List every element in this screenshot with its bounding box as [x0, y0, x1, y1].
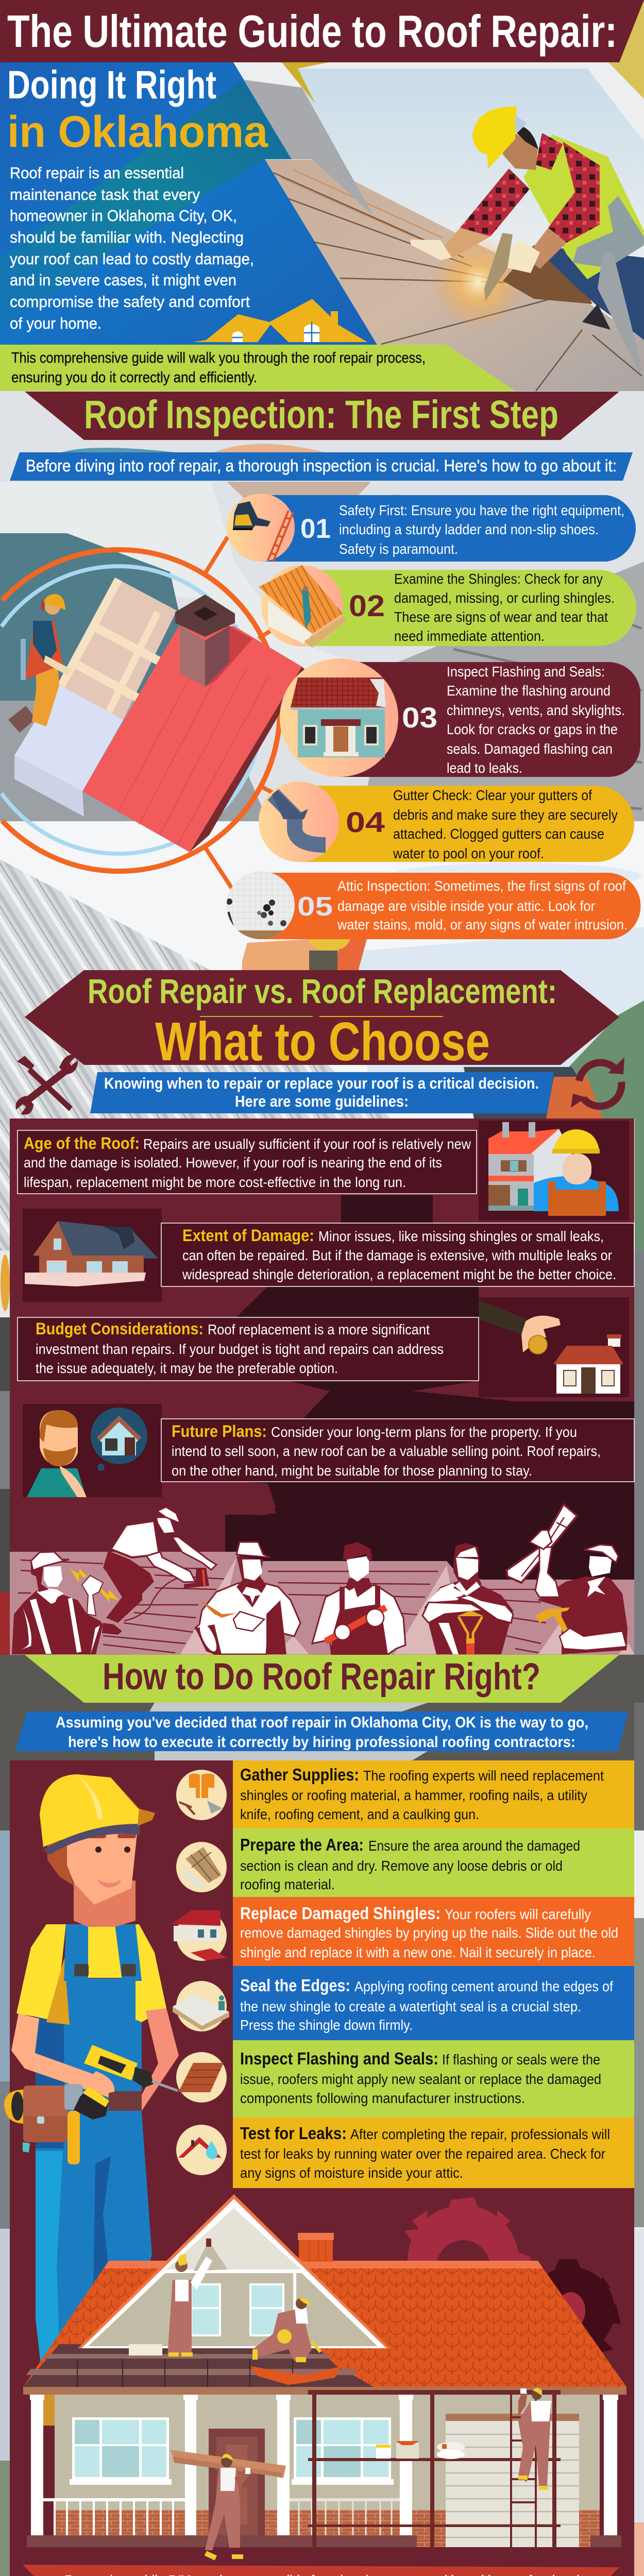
text box: budget considerations: the issue adequately, it may be the preferable option.: [36, 1360, 338, 1376]
text box: future plans: Future Plans:: [172, 1422, 267, 1440]
intro strip text: This comprehensive guide will walk you through the roof repair process,: [11, 350, 426, 366]
background: salmon roof tiles behind footer: [0, 2522, 644, 2576]
text: gutter check: debris and make sure they are securely: [393, 807, 618, 823]
text: gutter check: Gutter Check: Clear your gutters of: [393, 787, 592, 803]
lime intro strip: [0, 345, 515, 391]
subtitle: doing it right: Doing It Right: [7, 63, 216, 107]
text: safety first: including a sturdy ladder and non-slip shoes.: [339, 521, 599, 537]
step: test for leaks: test for leaks by running water over the repaired area. Check for: [240, 2146, 605, 2162]
intro paragraph: your roof can lead to costly damage,: [10, 250, 254, 268]
number 02: 02: [349, 589, 385, 623]
step: prepare the area: roofing material.: [240, 1876, 335, 1892]
step: replace damaged shingles: [233, 1897, 634, 1966]
text box: extent of damage: [161, 1223, 634, 1286]
banner text: how to intro: Assuming you've decided that roof repair in Oklahoma City, OK is the way to go,: [56, 1714, 588, 1731]
step: replace damaged shingles: Your roofers will carefully: [445, 1906, 591, 1922]
porch platform: [27, 2535, 621, 2547]
icon: replace arrows: [571, 1057, 624, 1108]
roofer with trowel: [195, 1542, 300, 1654]
picture box: roofer and house: [479, 1121, 629, 1221]
intro strip text: ensuring you do it correctly and efficiently.: [11, 369, 257, 386]
icon: roof truss: [259, 565, 346, 648]
icon: shingles, hammer and nails: [176, 1770, 227, 1820]
step: test for leaks: [233, 2117, 634, 2188]
banner text: inspection intro: Before diving into roof repair, a thorough inspection is crucial. Here's how to go about it:: [26, 456, 617, 475]
subtitle: in Oklahoma: in Oklahoma: [7, 107, 268, 157]
intro strip text: [11, 350, 426, 386]
gable: [78, 2194, 390, 2348]
intro paragraph: [10, 164, 254, 332]
roofer with shovel: [422, 1543, 513, 1654]
number 04: 04: [346, 806, 385, 838]
text box: extent of damage: Minor issues, like missing shingles or small leaks,: [318, 1228, 604, 1244]
text: attic inspection: [337, 878, 628, 933]
intro paragraph: should be familiar with. Neglecting: [10, 228, 244, 246]
text box: age of the roof: lifespan, replacement might be more cost-effective in the long run.: [24, 1174, 406, 1190]
step: test for leaks: Test for Leaks:: [240, 2124, 347, 2143]
windows: [70, 2417, 394, 2485]
text: gutter check: attached. Clogged gutters can cause: [393, 826, 604, 842]
text: examine the shingles: need immediate attention.: [394, 628, 545, 644]
step: test for leaks: After completing the repair, professionals will: [350, 2126, 610, 2142]
step: inspect flashing and seals: issue, roofers might apply new sealant or replace the damaged: [240, 2071, 601, 2087]
step 05: attic inspection: [226, 871, 641, 940]
text: inspect flashing: chimneys, vents, and skylights.: [447, 702, 625, 718]
columns: [30, 2395, 618, 2536]
text: safety first: [339, 502, 624, 557]
icon: applying sealant: [173, 1981, 229, 2031]
text: safety first: Safety is paramount.: [339, 541, 458, 557]
heading panel: how to do roof repair: [25, 1655, 619, 1703]
blue banner: how to intro: [15, 1711, 628, 1751]
intro paragraph: maintenance task that every: [10, 185, 200, 204]
number 01: 01: [300, 514, 331, 544]
intro paragraph: and in severe cases, it might even: [10, 271, 236, 289]
paint cans: [376, 2441, 465, 2459]
text box: budget considerations: investment than repairs. If your budget is tight and repairs can address: [36, 1341, 444, 1357]
illustration: roof with rings and connectors: [2, 537, 305, 888]
picture box: damaged house: [23, 1209, 162, 1302]
step: inspect flashing and seals: Inspect Flashing and Seals:: [240, 2049, 438, 2068]
closing ribbon: [23, 2565, 621, 2576]
number 03: 03: [402, 701, 437, 734]
siding panel: [446, 2414, 579, 2547]
step: prepare the area: [233, 1828, 634, 1897]
banner text: how to intro: [56, 1714, 588, 1751]
step: prepare the area: section is clean and dry. Remove any loose debris or old: [240, 1858, 563, 1874]
text: examine the shingles: Examine the Shingles: Check for any: [394, 571, 603, 587]
step: seal the edges: [233, 1966, 634, 2040]
text box: extent of damage: Extent of Damage:: [182, 1226, 314, 1245]
text: gutter check: [393, 787, 618, 861]
worker on ladder: [518, 2388, 551, 2490]
text: examine the shingles: [394, 571, 615, 644]
icon: wrench and screwdriver: [16, 1055, 77, 1114]
roof with scale shingles: [23, 2261, 626, 2387]
text box: future plans: on the other hand, might be suitable for those planning to stay.: [172, 1463, 532, 1479]
text: attic inspection: Attic Inspection: Sometimes, the first signs of roof: [337, 878, 626, 894]
blue banner: inspection intro: [10, 452, 633, 481]
heading: how to do roof repair right: How to Do Roof Repair Right?: [103, 1656, 540, 1698]
text: examine the shingles: damaged, missing, or curling shingles.: [394, 590, 615, 606]
step: inspect flashing and seals: components following manufacturer instructions.: [240, 2090, 525, 2106]
illustration: house under repair: [23, 2194, 626, 2561]
step: seal the edges: Applying roofing cement around the edges of: [354, 1978, 613, 1994]
text: inspect flashing: lead to leaks.: [447, 760, 522, 776]
intro paragraph: homeowner in Oklahoma City, OK,: [10, 207, 237, 225]
step: seal the edges: Seal the Edges:: [240, 1976, 350, 1995]
text: gutter check: water to pool on your roof.: [393, 845, 544, 861]
text box: budget considerations: Roof replacement is a more significant: [208, 1321, 430, 1337]
chimney: [298, 2233, 334, 2262]
picture box: man thinking of house: [23, 1404, 162, 1497]
step: gather supplies: knife, roofing cement, and a caulking gun.: [240, 1806, 479, 1822]
picture box: hand paying for house: [479, 1297, 629, 1397]
icon: boots and ladder: [227, 494, 295, 562]
text: inspect flashing: [447, 664, 625, 776]
roofer with nail gun: [102, 1507, 216, 1635]
text box: age of the roof: Age of the Roof:: [24, 1134, 140, 1153]
hero gold wedges: [282, 0, 644, 104]
illustration: giant construction worker: [4, 1774, 179, 2369]
icon: damaged house and shingles: [171, 1910, 227, 1961]
icon: gutter downspout: [259, 782, 339, 862]
step: gather supplies: [233, 1760, 634, 1828]
text box: age of the roof: [18, 1130, 477, 1194]
intro paragraph: of your home.: [10, 314, 101, 332]
door: [209, 2429, 265, 2535]
text box: age of the roof: and the damage is isolated. However, if your roof is nearing the end of its: [24, 1155, 442, 1171]
railings: [42, 2498, 401, 2536]
icon: water drop on roof: [176, 2125, 227, 2175]
panel: guidelines: [10, 1118, 634, 1655]
text: inspect flashing: Inspect Flashing and Seals:: [447, 664, 605, 680]
text: examine the shingles: These are signs of wear and tear that: [394, 609, 608, 625]
roofer with lightning bolt: [12, 1552, 119, 1654]
heading: what to choose: What to Choose: [155, 1011, 490, 1072]
text: inspect flashing: Look for cracks or gaps in the: [447, 721, 618, 737]
hero grey shard: [244, 80, 374, 216]
illustration: gears: [397, 2197, 621, 2354]
number 05: 05: [297, 892, 333, 922]
header band: [0, 0, 644, 62]
scaffold and ladder: [308, 2390, 561, 2552]
text box: age of the roof: Repairs are usually sufficient if your roof is relatively new: [143, 1136, 471, 1152]
illustration: roofers on the roof: [10, 1504, 634, 1655]
icon: mould on tiled wall: [226, 871, 295, 940]
text: attic inspection: damage are visible inside your attic. Look for: [337, 898, 595, 914]
heading panel: repair vs replacement: [25, 970, 619, 1065]
heading rule: [200, 1016, 444, 1017]
step: replace damaged shingles: shingle and replace it with a new one. Nail it securely in place.: [240, 1944, 596, 1960]
text: inspect flashing: Examine the flashing around: [447, 683, 611, 699]
text box: future plans: Consider your long-term plans for the property. If you: [271, 1424, 577, 1440]
step: test for leaks: any signs of moisture inside your attic.: [240, 2165, 463, 2181]
step: seal the edges: the new shingle to create a watertight seal is a crucial step.: [240, 1998, 581, 2014]
text box: budget considerations: Budget Considerations:: [36, 1319, 204, 1338]
step: gather supplies: The roofing experts will need replacement: [363, 1768, 604, 1784]
step: prepare the area: Prepare the Area:: [240, 1835, 364, 1854]
worker carrying planks: [170, 2450, 286, 2561]
step: prepare the area: Ensure the area around the damaged: [368, 1838, 580, 1854]
panel: steps: [10, 1760, 634, 2576]
step 03: inspect flashing: [280, 658, 640, 777]
intro paragraph: Roof repair is an essential: [10, 164, 184, 182]
icon: tile patch: [176, 2052, 227, 2103]
blue banner: repair vs replace intro: [90, 1072, 554, 1113]
text box: budget considerations: [18, 1317, 479, 1381]
roofer with pipe wrench: [312, 1542, 405, 1654]
hero photo: roofer at work: [265, 69, 644, 391]
eave board: [23, 2387, 626, 2395]
icon: roof frame: [176, 1842, 227, 1892]
step 02: examine the shingles: [259, 565, 636, 648]
wall: [42, 2395, 606, 2547]
step: gather supplies: Gather Supplies:: [240, 1765, 359, 1784]
hero blue panel: [0, 62, 377, 345]
worker laying shingles: [252, 2298, 320, 2362]
text box: future plans: [161, 1419, 634, 1482]
banner text: repair vs replace: Knowing when to repair or replace your roof is a critical decision.: [104, 1074, 539, 1092]
step: seal the edges: Press the shingle down firmly.: [240, 2017, 413, 2033]
roofer with hammer and plans: [506, 1504, 628, 1654]
intro paragraph: compromise the safety and comfort: [10, 293, 250, 311]
step 01: safety first: [227, 494, 636, 562]
step: gather supplies: shingles or roofing material, a hammer, roofing nails, a utility: [240, 1787, 587, 1803]
banner text: how to intro: here's how to execute it correctly by hiring professional roofing contractors:: [68, 1734, 575, 1751]
banner text: repair vs replace: Here are some guidelines:: [235, 1092, 409, 1110]
text: inspect flashing: seals. Damaged flashing can: [447, 741, 613, 757]
step: inspect flashing and seals: [233, 2040, 634, 2117]
icon: house with damaged roof: [280, 658, 398, 777]
heading panel: roof inspection: [25, 392, 619, 440]
banner text: repair vs replace: [104, 1074, 539, 1110]
icon: gold house outline: [193, 299, 367, 342]
step: replace damaged shingles: Replace Damaged Shingles:: [240, 1904, 440, 1923]
step: inspect flashing and seals: If flashing or seals were the: [442, 2052, 600, 2067]
worker painting gable: [129, 2239, 212, 2357]
text box: future plans: intend to sell soon, a new roof can be a valuable selling point. Roof repairs,: [172, 1443, 601, 1459]
step 04: gutter check: [259, 782, 634, 862]
